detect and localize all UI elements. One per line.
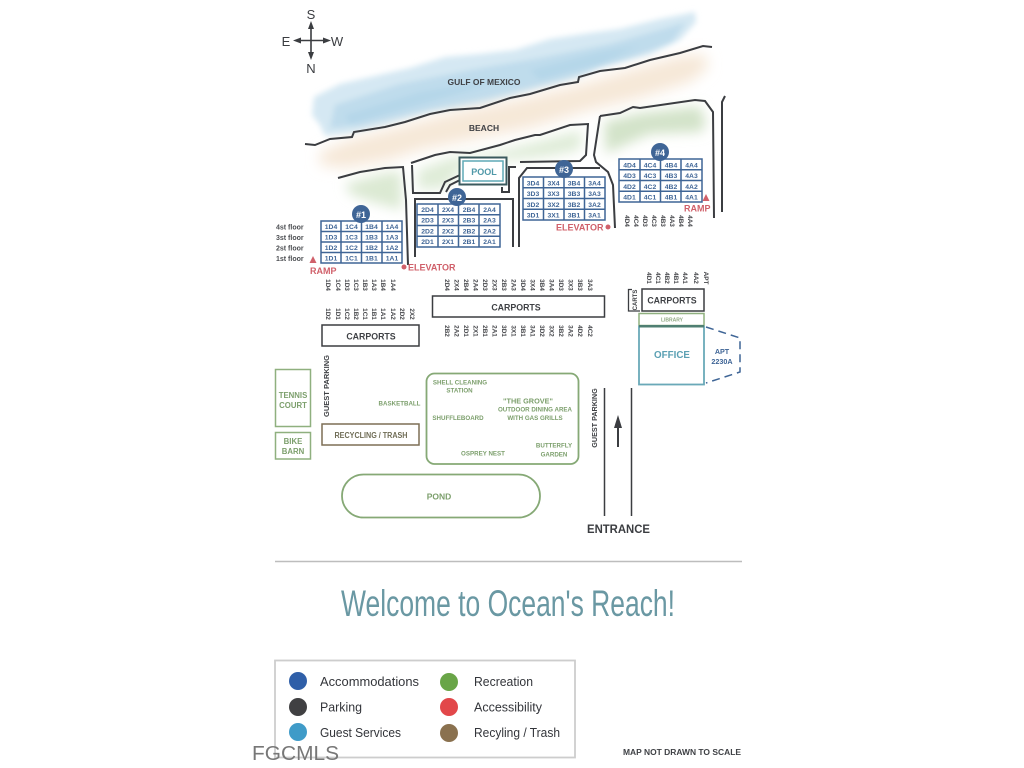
parking numbers above carports 3: 4A2: [692, 272, 699, 284]
carports 2: CARPORTS: [491, 302, 541, 312]
building 2: 2X4: [442, 207, 454, 214]
building 4: 4D1: [623, 194, 636, 202]
heading: gulf of mexico: GULF OF MEXICO: [448, 77, 521, 87]
recreation area: the grove: SHELL CLEANING: [433, 380, 487, 386]
building 1: 1C3: [345, 234, 358, 242]
bike barn: BARN: [282, 447, 305, 456]
building 3: 3A3: [588, 191, 601, 198]
floor labels: 1st floor: [276, 256, 304, 263]
parking numbers above carports 1: 1C3: [352, 279, 359, 291]
parking numbers above carports 2: [443, 279, 593, 291]
building 1: 1B2: [365, 245, 378, 252]
building 1: 1D1: [325, 256, 337, 262]
parking numbers above carports 2: 2A4: [472, 279, 478, 291]
watercolor: green lawn: [345, 106, 706, 210]
carports 1: [322, 325, 419, 346]
ramp west: [310, 256, 336, 276]
carports 3: CARPORTS: [647, 296, 697, 306]
parking numbers above carports 1: 1B4: [379, 279, 386, 291]
parking numbers below carports 2: 3A2: [566, 325, 574, 337]
parking numbers above carports 3: [645, 272, 709, 284]
ramp west: RAMP: [310, 266, 336, 276]
building 1: 1B4: [365, 224, 378, 231]
carports 3: [642, 289, 704, 311]
title: Welcome to Ocean's Reach!: [341, 583, 675, 624]
parking numbers above carports 3: 4C1: [654, 272, 661, 284]
pond: POND: [427, 492, 451, 502]
legend: accommodations: Accommodations: [320, 674, 419, 689]
parking numbers above carports 3: APT: [702, 272, 709, 284]
recreation area: the grove: STATION: [446, 388, 473, 394]
recreation area: the grove: OUTDOOR DINING AREA: [498, 406, 573, 414]
parking numbers under building 4: 4B3: [659, 215, 666, 227]
entrance label: ENTRANCE: [587, 522, 650, 536]
parking numbers above carports 2: 3B3: [576, 279, 583, 291]
parking numbers below carports 2: 2X1: [472, 325, 478, 337]
ramp east: RAMP: [684, 204, 710, 214]
carports 2: [432, 296, 604, 317]
parking numbers below carports 2: 3X1: [510, 325, 516, 337]
building 3: 3D1: [527, 212, 539, 220]
parking numbers below 1: 1C1: [361, 308, 368, 320]
compass: W: [331, 34, 344, 49]
compass: E: [282, 34, 291, 49]
legend: guest services: [289, 723, 401, 741]
parking numbers below 1: [324, 308, 415, 320]
watercolor: beach sand: [320, 54, 708, 168]
elevator 3: ELEVATOR: [556, 222, 604, 232]
building 3: 3B1: [568, 212, 580, 220]
building 4: 4A1: [685, 194, 698, 202]
building 4: 4B3: [665, 173, 677, 180]
building 4: 4D2: [623, 184, 636, 191]
parking numbers under building 4: 4D3: [641, 215, 648, 227]
parking numbers below carports 2: 3X2: [548, 325, 554, 337]
building 2: 2B2: [463, 228, 475, 236]
tennis court: TENNIS: [279, 391, 307, 400]
building 1: 1C1: [345, 256, 358, 262]
parking numbers under building 4: 4C3: [650, 215, 657, 227]
parking numbers above carports 3: 4B1: [672, 272, 679, 284]
building 3: 3B2: [568, 202, 580, 209]
guest parking west: GUEST PARKING: [322, 355, 331, 417]
legend: recreation: [440, 673, 533, 691]
legend: parking: [289, 698, 362, 716]
parking numbers above carports 2: 2D3: [481, 279, 488, 291]
legend: guest services: Guest Services: [320, 725, 401, 740]
parking numbers below carports 2: 4C2: [586, 325, 593, 337]
building 3: 3A2: [588, 202, 601, 209]
parking numbers above carports 2: 3A3: [586, 279, 593, 291]
building 3: 3X3: [547, 191, 560, 198]
parking numbers above carports 1: 1D4: [324, 279, 331, 291]
parking numbers under building 4: 4C4: [632, 215, 639, 227]
parking numbers below 1: 1D1: [334, 308, 341, 320]
parking numbers below carports 2: [443, 325, 593, 337]
parking numbers below 1: 2D2: [398, 308, 405, 320]
parking numbers above carports 2: 2X3: [490, 279, 498, 291]
carts: CARTS: [633, 290, 639, 310]
parking numbers above carports 2: 3D3: [557, 279, 564, 291]
building 3: 3D2: [527, 202, 539, 209]
building 3: 3B3: [568, 191, 580, 198]
building 4: 4B2: [665, 184, 677, 191]
parking numbers above carports 1: 1D3: [343, 279, 350, 291]
building 4: 4A3: [685, 173, 698, 180]
building 3: 3D4: [527, 180, 539, 188]
apt 2230a: 2230A: [711, 357, 733, 366]
parking numbers below 1: 1A2: [389, 308, 396, 320]
parking numbers above carports 1: 1A3: [370, 279, 377, 291]
building 4: 4A2: [685, 184, 698, 191]
floor labels: 3st floor: [276, 235, 304, 242]
recreation area: the grove: [426, 374, 578, 464]
entrance road: [604, 388, 632, 516]
building 4: 4A4: [685, 162, 698, 170]
floor labels: [276, 224, 304, 263]
heading: beach: BEACH: [469, 123, 499, 133]
parking numbers above carports 2: 2B4: [462, 279, 469, 291]
road and property lines: [338, 96, 725, 265]
note: map not drawn to scale: MAP NOT DRAWN TO SCALE: [623, 748, 742, 757]
compass: N: [306, 61, 316, 76]
shoreline: [305, 46, 712, 145]
parking numbers under building 4: 4D4: [623, 215, 630, 227]
parking numbers above carports 1: 1B3: [361, 279, 368, 291]
building 4: [619, 143, 702, 202]
watercolor: gulf water: [312, 12, 696, 136]
parking numbers under building 4: 4B4: [677, 215, 684, 227]
pool: POOL: [471, 167, 497, 177]
building 1: [321, 205, 402, 263]
building 3: 3A4: [588, 180, 601, 188]
office: [639, 325, 704, 384]
building 3: 3A1: [588, 212, 601, 220]
parking numbers below carports 2: 3D2: [538, 325, 545, 337]
parking numbers below carports 2: 2D1: [462, 325, 469, 337]
floor labels: 2st floor: [276, 246, 304, 252]
legend: recycling and trash: [440, 724, 560, 742]
parking numbers below 1: 1B2: [352, 308, 359, 320]
building 1: 1A4: [386, 224, 398, 231]
watermark: FGCMLS: [252, 743, 339, 765]
carports 1: CARPORTS: [346, 332, 396, 342]
parking numbers below carports 2: 3B1: [519, 325, 526, 337]
building 1: 1A2: [386, 245, 398, 252]
basketball: BASKETBALL: [379, 400, 421, 408]
parking numbers above carports 3: 4A1: [681, 272, 688, 284]
floor labels: 4st floor: [276, 224, 304, 232]
parking numbers below 1: 2X2: [408, 308, 415, 320]
building 4: 4C2: [644, 184, 656, 191]
building 4: 4C1: [644, 194, 656, 202]
parking numbers above carports 2: 3B4: [538, 279, 545, 291]
legend: [275, 660, 575, 758]
tennis court: COURT: [279, 401, 307, 410]
legend: recreation: Recreation: [474, 674, 533, 689]
legend: accommodations: [289, 672, 419, 690]
parking numbers above carports 2: 3A4: [548, 279, 554, 291]
legend: recycling and trash: Recyling / Trash: [474, 725, 560, 740]
recreation area: the grove: OSPREY NEST: [461, 450, 505, 458]
tennis court: [276, 370, 310, 426]
building 3: 3X4: [547, 180, 560, 188]
parking numbers below carports 2: 3D1: [500, 325, 507, 337]
library: [639, 314, 704, 326]
parking numbers above carports 1: [324, 279, 396, 291]
building 1: 1A1: [386, 256, 398, 262]
building 2: 2X1: [442, 239, 454, 246]
badge 1: #1: [356, 210, 366, 220]
parking numbers below 1: 1D2: [324, 308, 331, 320]
recycling and trash: [322, 424, 419, 445]
badge 3: #3: [559, 165, 569, 175]
building 2: 2X3: [442, 218, 454, 224]
building 4: 4B1: [665, 194, 677, 202]
recreation area: the grove: SHUFFLEBOARD: [432, 415, 484, 422]
building 2: 2D4: [421, 207, 434, 214]
building 2: 2D3: [421, 218, 434, 224]
building 1: 1B3: [365, 234, 378, 242]
carts: [628, 290, 640, 311]
recreation area: the grove: "THE GROVE": [503, 396, 553, 406]
parking numbers above carports 2: 3X3: [566, 279, 574, 291]
parking numbers above carports 2: 2A3: [510, 279, 516, 291]
apt 2230a: APT: [715, 347, 730, 356]
parking numbers below carports 2: 3A1: [528, 325, 536, 337]
parking numbers above carports 3: 4B2: [663, 272, 670, 284]
building 2: 2D2: [421, 228, 434, 236]
parking numbers under building 4: [623, 215, 693, 227]
parking numbers below carports 2: 2B1: [481, 325, 488, 337]
building 2: 2A4: [483, 207, 496, 214]
office: OFFICE: [654, 350, 690, 361]
building 2: 2B1: [463, 239, 475, 246]
building 1: 1C4: [345, 224, 358, 231]
legend: parking: Parking: [320, 700, 362, 714]
parking numbers below 1: 1A1: [379, 308, 386, 320]
building 1: 1B1: [365, 256, 378, 262]
parking numbers below 1: 1C2: [343, 308, 350, 320]
building 3: 3X2: [547, 202, 560, 209]
building 3: 3D3: [527, 191, 539, 198]
compass: [282, 7, 344, 76]
badge 2: #2: [452, 193, 462, 203]
parking numbers above carports 2: 3X4: [528, 279, 536, 291]
badge 4: #4: [655, 148, 665, 158]
building 4: 4D3: [623, 173, 636, 180]
ramp east: [684, 194, 710, 214]
guest parking east: GUEST PARKING: [590, 388, 599, 448]
building 2: 2X2: [442, 228, 454, 236]
bike barn: BIKE: [284, 437, 302, 446]
parking numbers above carports 1: 1C4: [334, 279, 341, 291]
apt 2230a: [706, 327, 740, 383]
parking numbers above carports 2: 2X4: [452, 279, 460, 291]
building 2: 2A2: [483, 228, 496, 236]
building 1: 1C2: [345, 245, 358, 252]
recreation area: the grove: GARDEN: [541, 452, 568, 458]
pond: [342, 474, 540, 518]
building 2: 2B4: [463, 207, 475, 214]
building 1: 1D2: [325, 245, 337, 252]
building 3: [523, 160, 605, 220]
arrow: entrance direction: [614, 415, 622, 447]
building 4: 4D4: [623, 162, 636, 170]
building 1: 1D4: [325, 224, 337, 231]
parking numbers below carports 2: 2B2: [443, 325, 450, 337]
parking numbers above carports 3: 4D1: [645, 272, 652, 284]
building 2: 2B3: [463, 218, 475, 224]
parking numbers below 1: 1B1: [370, 308, 377, 320]
parking numbers below carports 2: 2A1: [490, 325, 498, 337]
building 1: 1A3: [386, 234, 398, 242]
building 2: 2A1: [483, 239, 496, 246]
building 1: 1D3: [325, 234, 337, 242]
building 2: 2D1: [421, 239, 434, 246]
elevator 1: ELEVATOR: [408, 262, 456, 272]
bike barn: [276, 432, 310, 459]
parking numbers below carports 2: 4D2: [576, 325, 583, 337]
parking numbers below carports 2: 2A2: [452, 325, 460, 337]
parking numbers above carports 2: 2B3: [500, 279, 507, 291]
parking numbers under building 4: 4A4: [686, 215, 693, 227]
recycling and trash: RECYCLING / TRASH: [334, 431, 408, 440]
parking numbers below carports 2: 3B2: [557, 325, 564, 337]
building 4: 4C3: [644, 173, 656, 180]
library: LIBRARY: [661, 318, 684, 324]
building 3: 3B4: [568, 180, 580, 188]
legend: accessibility: [440, 698, 542, 716]
building 3: 3X1: [547, 212, 560, 220]
pool: [460, 158, 506, 184]
recreation area: the grove: WITH GAS GRILLS: [507, 415, 563, 422]
building 4: 4C4: [644, 162, 656, 170]
legend: accessibility: Accessibility: [474, 700, 542, 714]
parking numbers above carports 1: 1A4: [389, 279, 396, 291]
compass: S: [307, 7, 316, 22]
building 2: 2A3: [483, 218, 496, 224]
building 4: 4B4: [665, 162, 677, 170]
building 2: [417, 188, 500, 247]
recreation area: the grove: BUTTERFLY: [536, 442, 573, 450]
parking numbers under building 4: 4A3: [668, 215, 675, 227]
parking numbers above carports 2: 2D4: [443, 279, 450, 291]
parking numbers above carports 2: 3D4: [519, 279, 526, 291]
